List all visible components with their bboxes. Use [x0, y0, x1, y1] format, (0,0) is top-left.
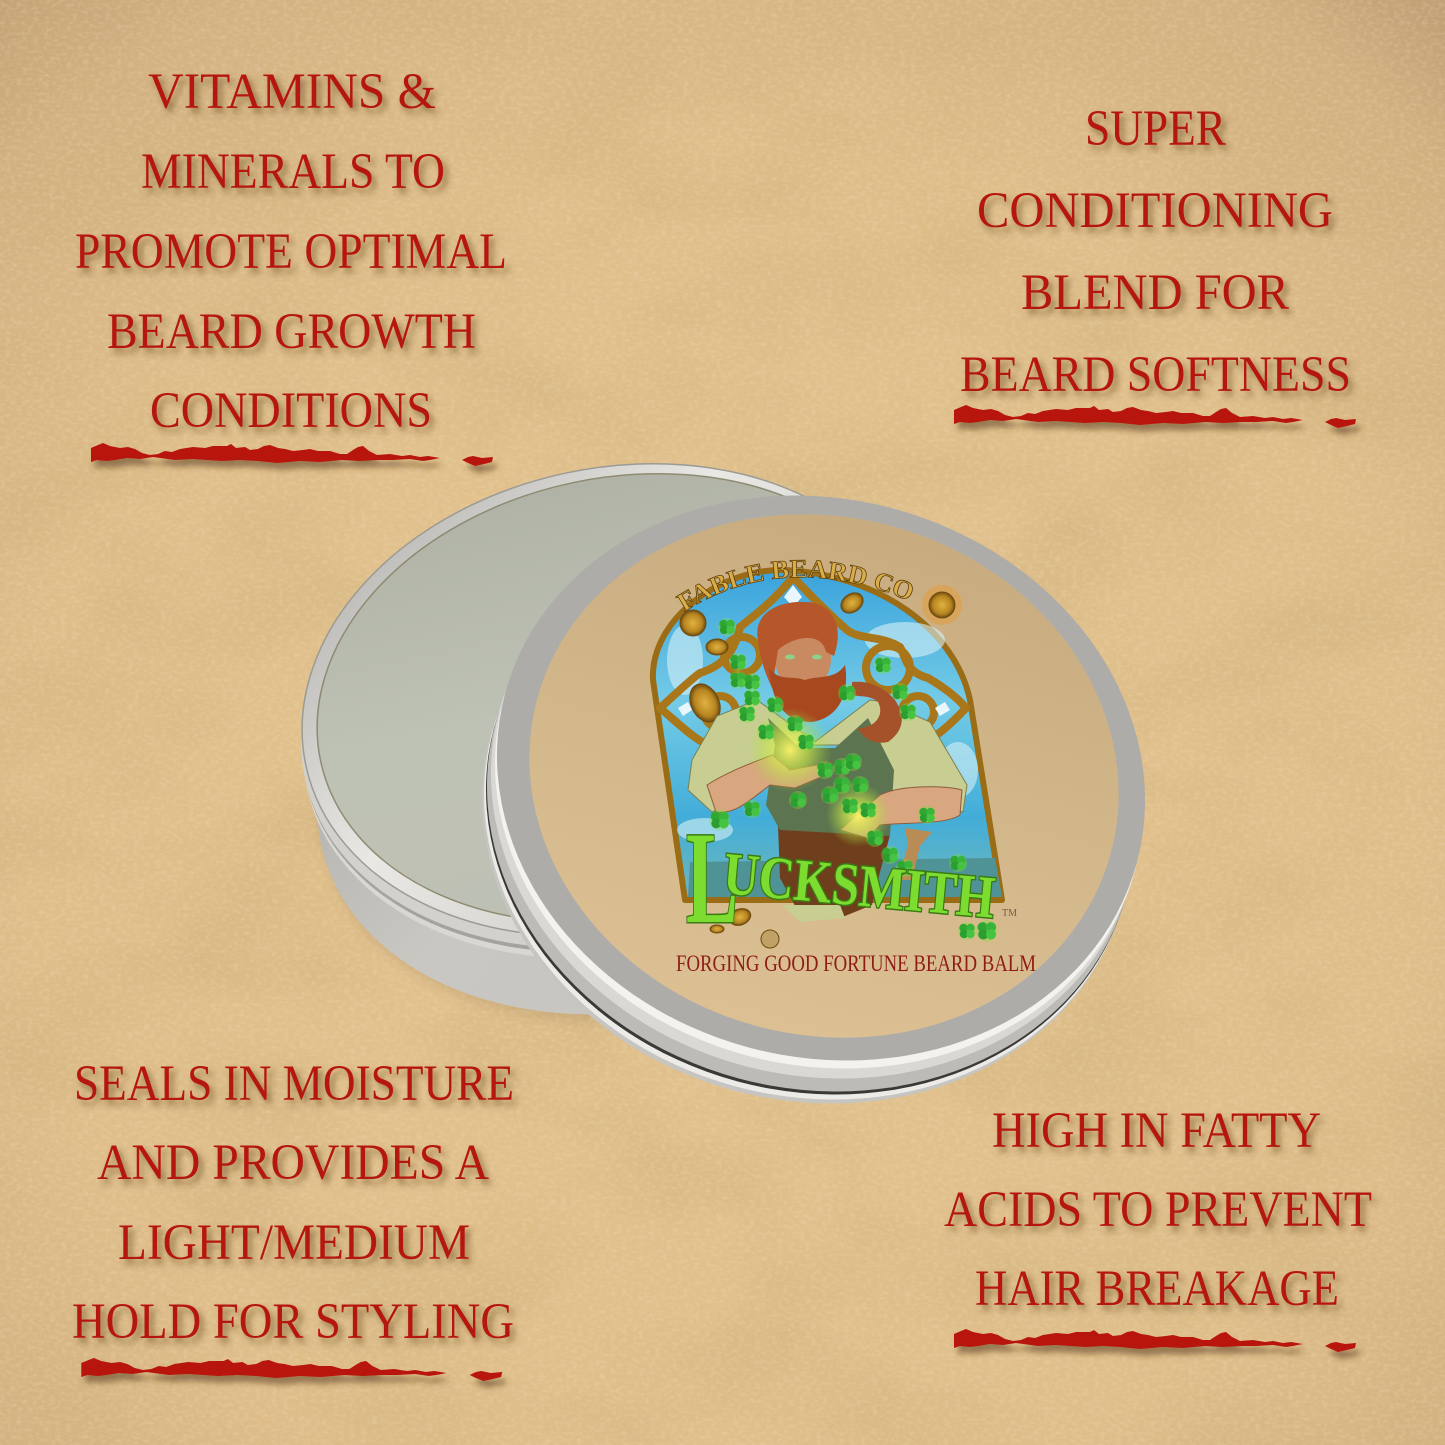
product name: Lucksmith: [686, 804, 998, 951]
text block: vitamins and minerals: PROMOTE OPTIMAL: [75, 224, 507, 280]
text block: seals in moisture: HOLD FOR STYLING: [72, 1294, 514, 1350]
text block: super conditioning: BLEND FOR: [1021, 265, 1289, 321]
text block: super conditioning: CONDITIONING: [977, 183, 1333, 239]
paper label: [470, 449, 1178, 1103]
tin lid: [418, 424, 1209, 1175]
text block: high in fatty acids: ACIDS TO PREVENT: [944, 1182, 1372, 1238]
magical glows: [748, 708, 890, 847]
text block: seals in moisture: AND PROVIDES A: [97, 1135, 489, 1191]
eyes: [785, 654, 822, 660]
torn red underline: top left: [91, 443, 493, 466]
text block: super conditioning: SUPER: [1085, 101, 1226, 157]
tagline: FORGING GOOD FORTUNE BEARD BALM: [676, 951, 1036, 976]
torn red underline: bottom right: [954, 1329, 1356, 1352]
arch window with sky: [653, 570, 1002, 900]
text block: seals in moisture: SEALS IN MOISTURE: [74, 1056, 514, 1112]
balm surface: [275, 420, 961, 976]
sky clouds: [667, 622, 978, 842]
text block: high in fatty acids: [944, 1103, 1372, 1317]
text block: vitamins and minerals: VITAMINS &: [148, 64, 436, 120]
tin rim: [258, 408, 970, 992]
beard: [769, 665, 846, 722]
knotwork diamonds: [678, 585, 950, 716]
sea: [688, 858, 1002, 897]
hair: [757, 602, 838, 688]
gold celtic knotwork: [660, 577, 966, 749]
tin body: [257, 419, 995, 1077]
flying clovers: [709, 618, 998, 942]
text block: seals in moisture: LIGHT/MEDIUM: [118, 1215, 470, 1271]
text block: vitamins and minerals: BEARD GROWTH: [107, 304, 476, 360]
illustration: Lucksmith logo: [650, 560, 1036, 976]
trademark: TM: [1002, 908, 1017, 919]
product name: Lucksmith: L: [686, 804, 738, 951]
coins: [680, 585, 962, 948]
open tin with balm: [257, 408, 995, 1077]
brand name: Fable Beard Co: FABLE BEARD CO: [675, 560, 913, 612]
text block: vitamins and minerals: CONDITIONS: [150, 383, 432, 439]
cloth below belt: [782, 905, 845, 922]
braided hair: [852, 682, 902, 743]
torn red underline: top right: [954, 405, 1356, 428]
torn red underline: bottom left: [81, 1358, 502, 1381]
text block: super conditioning: BEARD SOFTNESS: [960, 347, 1351, 403]
bearded blacksmith figure: [688, 602, 967, 922]
product name: Lucksmith: UCKSMITH: [721, 840, 998, 931]
text block: super conditioning: [960, 101, 1351, 403]
text block: vitamins and minerals: [75, 64, 507, 439]
lid face ring: [433, 424, 1209, 1132]
lid side wall: [418, 432, 1207, 1175]
green vest: [766, 718, 894, 836]
text block: vitamins and minerals: MINERALS TO: [141, 144, 445, 200]
text block: high in fatty acids: HIGH IN FATTY: [992, 1103, 1321, 1159]
belt and trousers: [778, 825, 890, 918]
shirt and sleeves: [688, 700, 967, 812]
right forearm and hand: [840, 787, 962, 838]
text block: seals in moisture: [72, 1056, 514, 1350]
hammer: [898, 828, 932, 880]
text block: high in fatty acids: HAIR BREAKAGE: [975, 1261, 1339, 1317]
face: [775, 624, 831, 692]
left forearm and hand: [707, 755, 832, 812]
